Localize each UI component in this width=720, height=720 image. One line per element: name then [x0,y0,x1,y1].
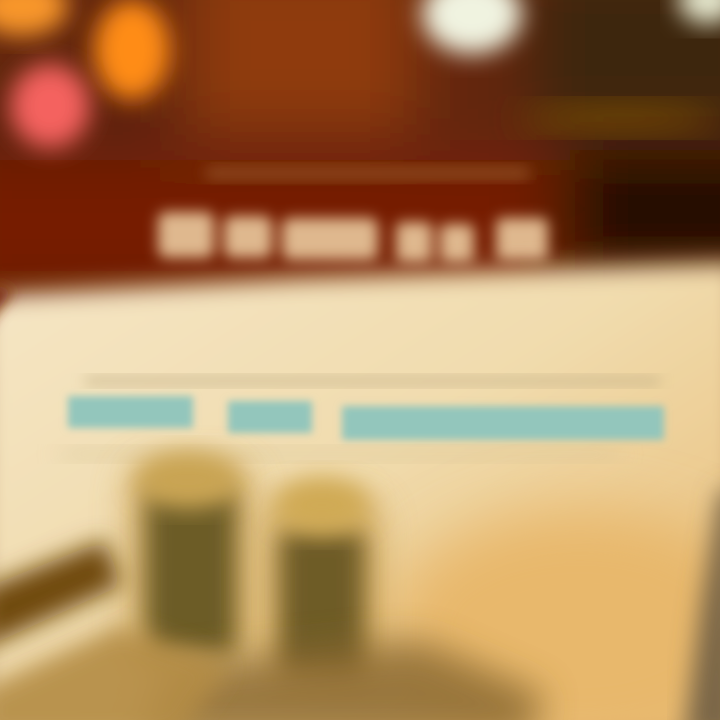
object: dark edge right [684,490,720,720]
paper warm lower right [390,510,720,720]
teal table header bar [68,396,664,440]
blurred small caption [205,166,530,180]
coin stack: left [128,452,252,665]
blurred line under bar [60,448,620,460]
dark base under coins [140,640,545,720]
bokeh lights [0,0,720,148]
background: dark red wall [0,0,720,340]
light: olive right [520,106,720,130]
object: pen at left [0,540,122,650]
light: white right [678,0,720,24]
paper left shade [0,280,14,345]
paper sheet [0,262,720,720]
blurred line above table [85,376,660,386]
light: white centre [422,0,522,54]
blurred title [158,212,548,262]
light: top left amber [0,0,68,36]
light: orange [94,0,170,100]
coin stack: right [262,477,380,685]
light: pink [10,64,90,148]
